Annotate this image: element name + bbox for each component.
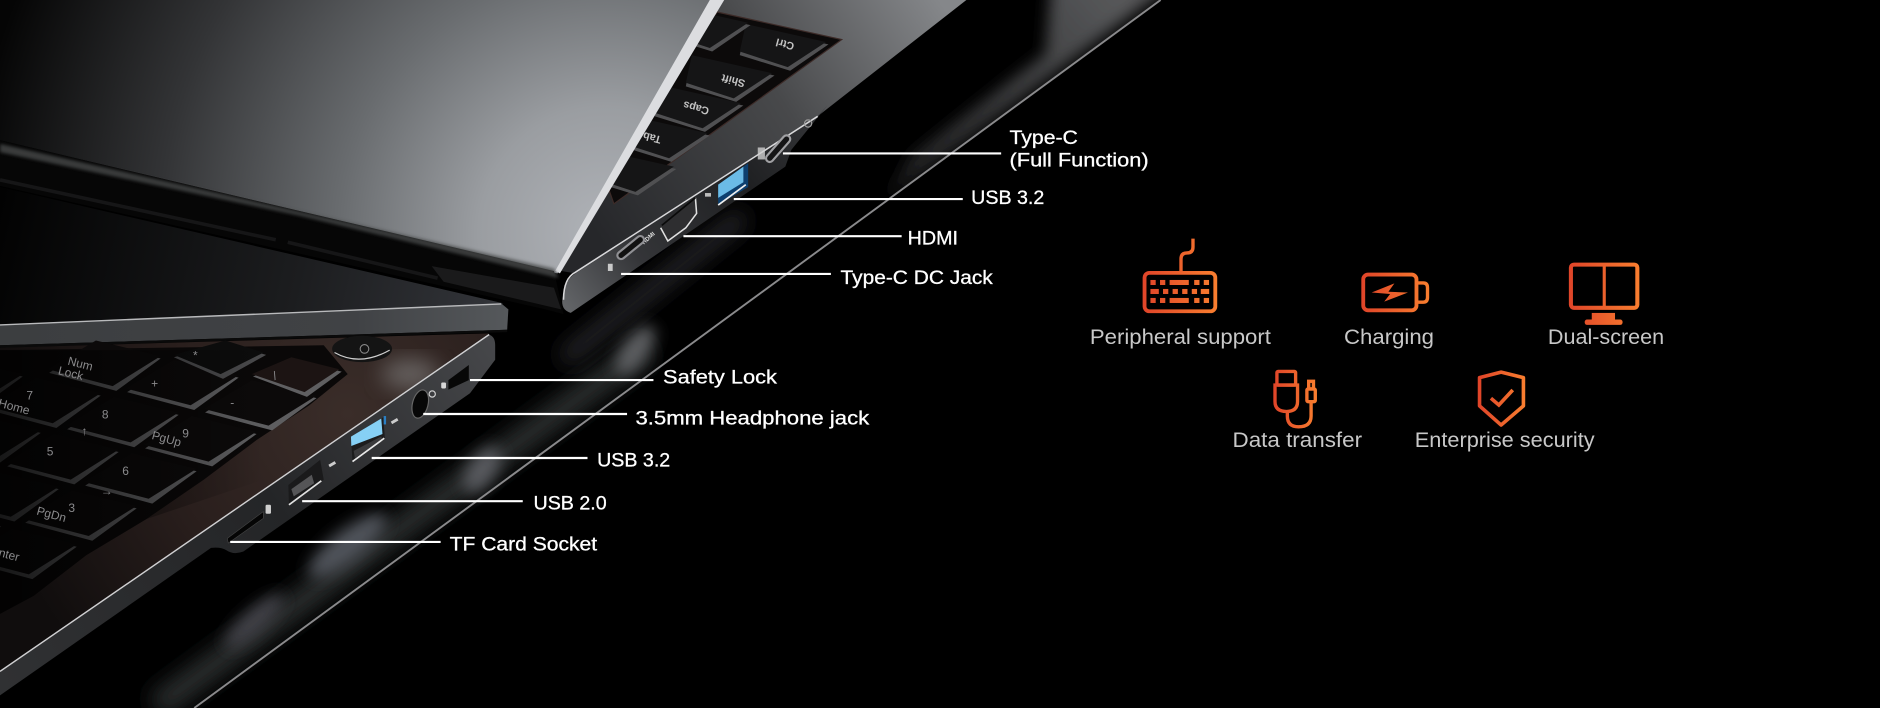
- text: Enterprise security: Enterprise security: [1415, 427, 1595, 452]
- feature: data transfer: [1233, 371, 1362, 452]
- hinge band: [0, 140, 564, 314]
- key legends: Lock: [57, 363, 85, 383]
- upper laptop lid: [0, 0, 724, 273]
- keyboard well: [605, 12, 842, 204]
- leader line: USB 3.2 upper: [734, 198, 963, 200]
- leader line: Type-C DC Jack: [621, 273, 831, 275]
- icon: dual monitor: [1571, 264, 1637, 325]
- key legends: *: [193, 349, 198, 363]
- key legends: PgUp: [150, 428, 183, 450]
- port: USB 3.2 blue: [705, 163, 748, 205]
- leader line: headphone jack: [423, 413, 627, 415]
- key legends: 8: [102, 407, 109, 421]
- key legends: 6: [122, 464, 129, 478]
- lower laptop deck: [0, 333, 489, 671]
- key legends: [0, 349, 279, 564]
- upper keys: Tab: [641, 129, 663, 145]
- port: USB 2.0: [288, 460, 336, 505]
- label: full function line: (Full Function): [1010, 150, 1149, 172]
- feature: enterprise security: [1415, 372, 1595, 452]
- label: USB 3.2 upper: USB 3.2: [971, 187, 1044, 209]
- lower laptop lid: [0, 187, 508, 347]
- port: TF card slot: [227, 505, 271, 543]
- icon: battery: [1363, 275, 1428, 310]
- icon: USB cable: [1275, 371, 1315, 427]
- label: Type-C full function: Type-C: [1010, 127, 1078, 149]
- reflection edge line: [194, 0, 1161, 708]
- upper keys: Ctrl: [775, 35, 796, 52]
- key legends: ↑: [82, 424, 88, 438]
- key legends: Num: [66, 354, 94, 374]
- leader line: HDMI: [683, 235, 902, 237]
- port: headphone jack: [409, 388, 435, 420]
- key legends: -: [230, 395, 234, 409]
- label: Type-C DC Jack: Type-C DC Jack: [840, 267, 993, 289]
- key legends: 9: [182, 427, 189, 441]
- lid bright edge: [555, 0, 724, 273]
- label: USB 2.0: USB 2.0: [534, 493, 607, 515]
- port: Type-C full function: [758, 120, 812, 159]
- text: Data transfer: Data transfer: [1233, 427, 1362, 452]
- label: 3.5mm Headphone jack: 3.5mm Headphone jack: [635, 407, 869, 429]
- key legends: →: [101, 484, 113, 498]
- icon: keyboard: [1145, 239, 1215, 311]
- upper keys: [588, 5, 828, 195]
- feature: charging: [1344, 275, 1434, 349]
- upper laptop side panel: [562, 106, 827, 313]
- key legends: 3: [68, 501, 75, 515]
- port: HDMI: [641, 198, 697, 246]
- leader line: USB 2.0: [302, 500, 523, 502]
- label: HDMI: HDMI: [908, 228, 958, 250]
- icon: shield: [1480, 372, 1523, 425]
- numeric keypad keys: [0, 341, 348, 614]
- port: safety lock: [441, 365, 469, 390]
- upper keys: Caps: [682, 98, 711, 117]
- key legends: 7: [26, 388, 33, 402]
- table reflection: [156, 0, 1199, 708]
- upper laptop keyboard deck: [554, 0, 966, 273]
- lower laptop side panel: [0, 335, 495, 695]
- feature: dual-screen: [1548, 264, 1664, 349]
- leader line: USB 3.2 lower: [372, 457, 588, 459]
- label: USB 3.2 lower: USB 3.2: [597, 449, 670, 471]
- key legends: 5: [47, 445, 54, 459]
- key legends: PgDn: [35, 504, 68, 525]
- leader line: TF Card Socket: [230, 541, 441, 543]
- key legends: /: [271, 368, 279, 383]
- text: Peripheral support: Peripheral support: [1090, 324, 1271, 349]
- text: Dual-screen: Dual-screen: [1548, 324, 1664, 349]
- text: Charging: Charging: [1344, 324, 1434, 349]
- label: TF Card Socket: TF Card Socket: [450, 533, 598, 555]
- port: USB 3.2: [351, 416, 398, 462]
- feature: peripheral support: [1090, 239, 1271, 349]
- upper keys: Shift: [720, 71, 747, 89]
- label: Safety Lock: Safety Lock: [663, 367, 777, 389]
- leader line: Type-C full function: [783, 152, 1001, 154]
- port: HDMI: HDMI: [641, 231, 657, 246]
- port: Type-C DC: [608, 240, 640, 271]
- power button: [332, 336, 392, 362]
- key legends: +: [151, 376, 158, 390]
- leader line: Safety Lock: [470, 379, 653, 381]
